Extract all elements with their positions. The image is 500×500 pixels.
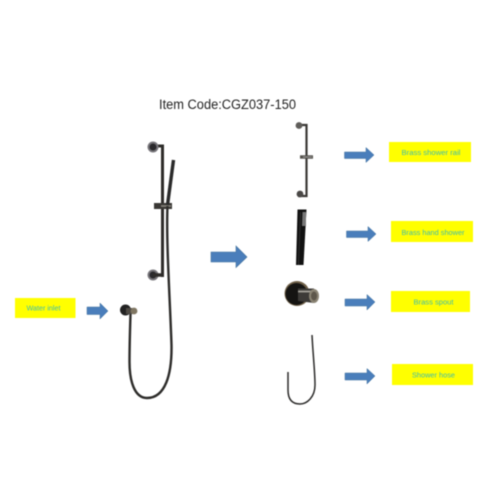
- product: full shower set: [120, 142, 174, 398]
- arrow: water inlet: [87, 303, 108, 319]
- wall spout: [120, 304, 131, 316]
- rail: [153, 146, 162, 277]
- label: shower hose: Shower hose: [412, 370, 455, 380]
- rail bracket: [154, 203, 172, 209]
- label: brass shower rail: [389, 142, 471, 162]
- label: brass spout: Brass spout: [414, 298, 454, 306]
- arrow: brass spout: [345, 294, 375, 310]
- part: shower hose: [288, 335, 315, 404]
- arrow: shower rail: [344, 148, 374, 162]
- title: Item Code:CGZ037-150: [159, 97, 296, 112]
- arrow: shower hose: [345, 368, 375, 384]
- hand shower: [168, 160, 174, 205]
- label: brass spout: [391, 291, 470, 312]
- arrow: hand shower: [346, 226, 376, 242]
- part: hand shower: [296, 210, 306, 265]
- part: shower rail: [296, 122, 313, 197]
- part: brass spout: [284, 281, 319, 306]
- label: brass shower rail: Brass shower rail: [402, 148, 461, 157]
- label: brass hand shower: Brass hand shower: [402, 228, 465, 237]
- hose: [130, 206, 172, 398]
- label: brass hand shower: [391, 221, 473, 242]
- label: water inlet: Water inlet: [26, 304, 61, 312]
- arrow: main: [211, 246, 247, 268]
- label: water inlet: [15, 298, 76, 318]
- label: shower hose: [392, 364, 473, 385]
